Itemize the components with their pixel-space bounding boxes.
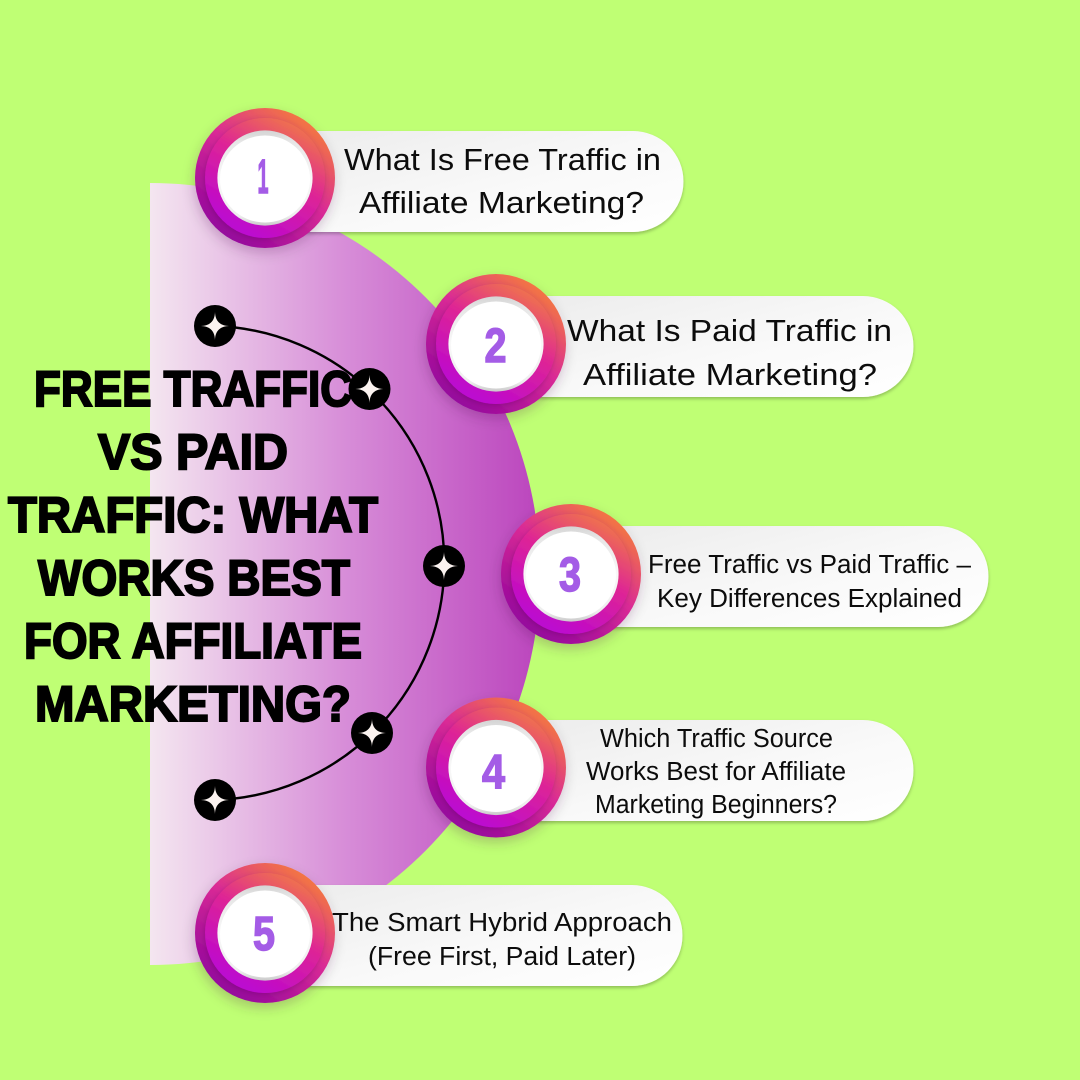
- icon: star node 1: [194, 305, 236, 347]
- label 4: Works Best for Affiliate: [586, 758, 846, 786]
- label 1: [344, 142, 661, 220]
- label 2: [567, 313, 892, 392]
- badge 3: 3: [559, 549, 581, 602]
- badge 5: [195, 863, 335, 1003]
- item 2: [426, 274, 914, 414]
- title: MARKETING?: [35, 676, 351, 732]
- label 5: (Free First, Paid Later): [368, 943, 636, 971]
- label 4: [586, 725, 846, 819]
- badge 4: [426, 698, 566, 838]
- pill 5: [290, 885, 682, 986]
- item 3: [501, 504, 988, 644]
- badge 1: [195, 108, 335, 248]
- label 2: Affiliate Marketing?: [583, 357, 877, 392]
- badge 1: 1: [258, 151, 268, 204]
- label 5: [332, 909, 672, 971]
- title: FOR AFFILIATE: [24, 613, 362, 669]
- item 5: [195, 863, 682, 1003]
- title: WORKS BEST: [38, 550, 350, 606]
- badge 5: 5: [253, 908, 275, 961]
- title: TRAFFIC: WHAT: [8, 487, 378, 543]
- label 2: What Is Paid Traffic in: [567, 313, 892, 348]
- icon: star node 5: [194, 779, 236, 821]
- badge 2: [426, 274, 566, 414]
- icon: star node 4: [351, 712, 393, 754]
- icon: star node 2: [348, 368, 390, 410]
- label 3: Free Traffic vs Paid Traffic –: [648, 551, 972, 579]
- title: VS PAID: [98, 424, 288, 480]
- item 4: [426, 698, 914, 838]
- icon: star node 3: [423, 545, 465, 587]
- pill 2: [521, 296, 914, 397]
- label 4: Which Traffic Source: [600, 725, 833, 753]
- label 1: Affiliate Marketing?: [359, 185, 644, 220]
- label 3: [648, 551, 972, 613]
- badge 4: 4: [482, 746, 505, 800]
- badge 2: 2: [484, 320, 506, 373]
- arc connector: [215, 326, 444, 800]
- label 1: What Is Free Traffic in: [344, 142, 661, 177]
- pill 3: [596, 526, 988, 627]
- pill 4: [521, 720, 914, 821]
- label 5: The Smart Hybrid Approach: [332, 909, 672, 937]
- title: FREE TRAFFIC: [34, 361, 352, 417]
- title: [8, 361, 378, 732]
- item 1: [195, 108, 684, 248]
- label 4: Marketing Beginners?: [595, 791, 837, 819]
- half circle panel: [150, 183, 540, 965]
- badge 3: [501, 504, 641, 644]
- label 3: Key Differences Explained: [657, 585, 962, 613]
- pill 1: [290, 131, 684, 232]
